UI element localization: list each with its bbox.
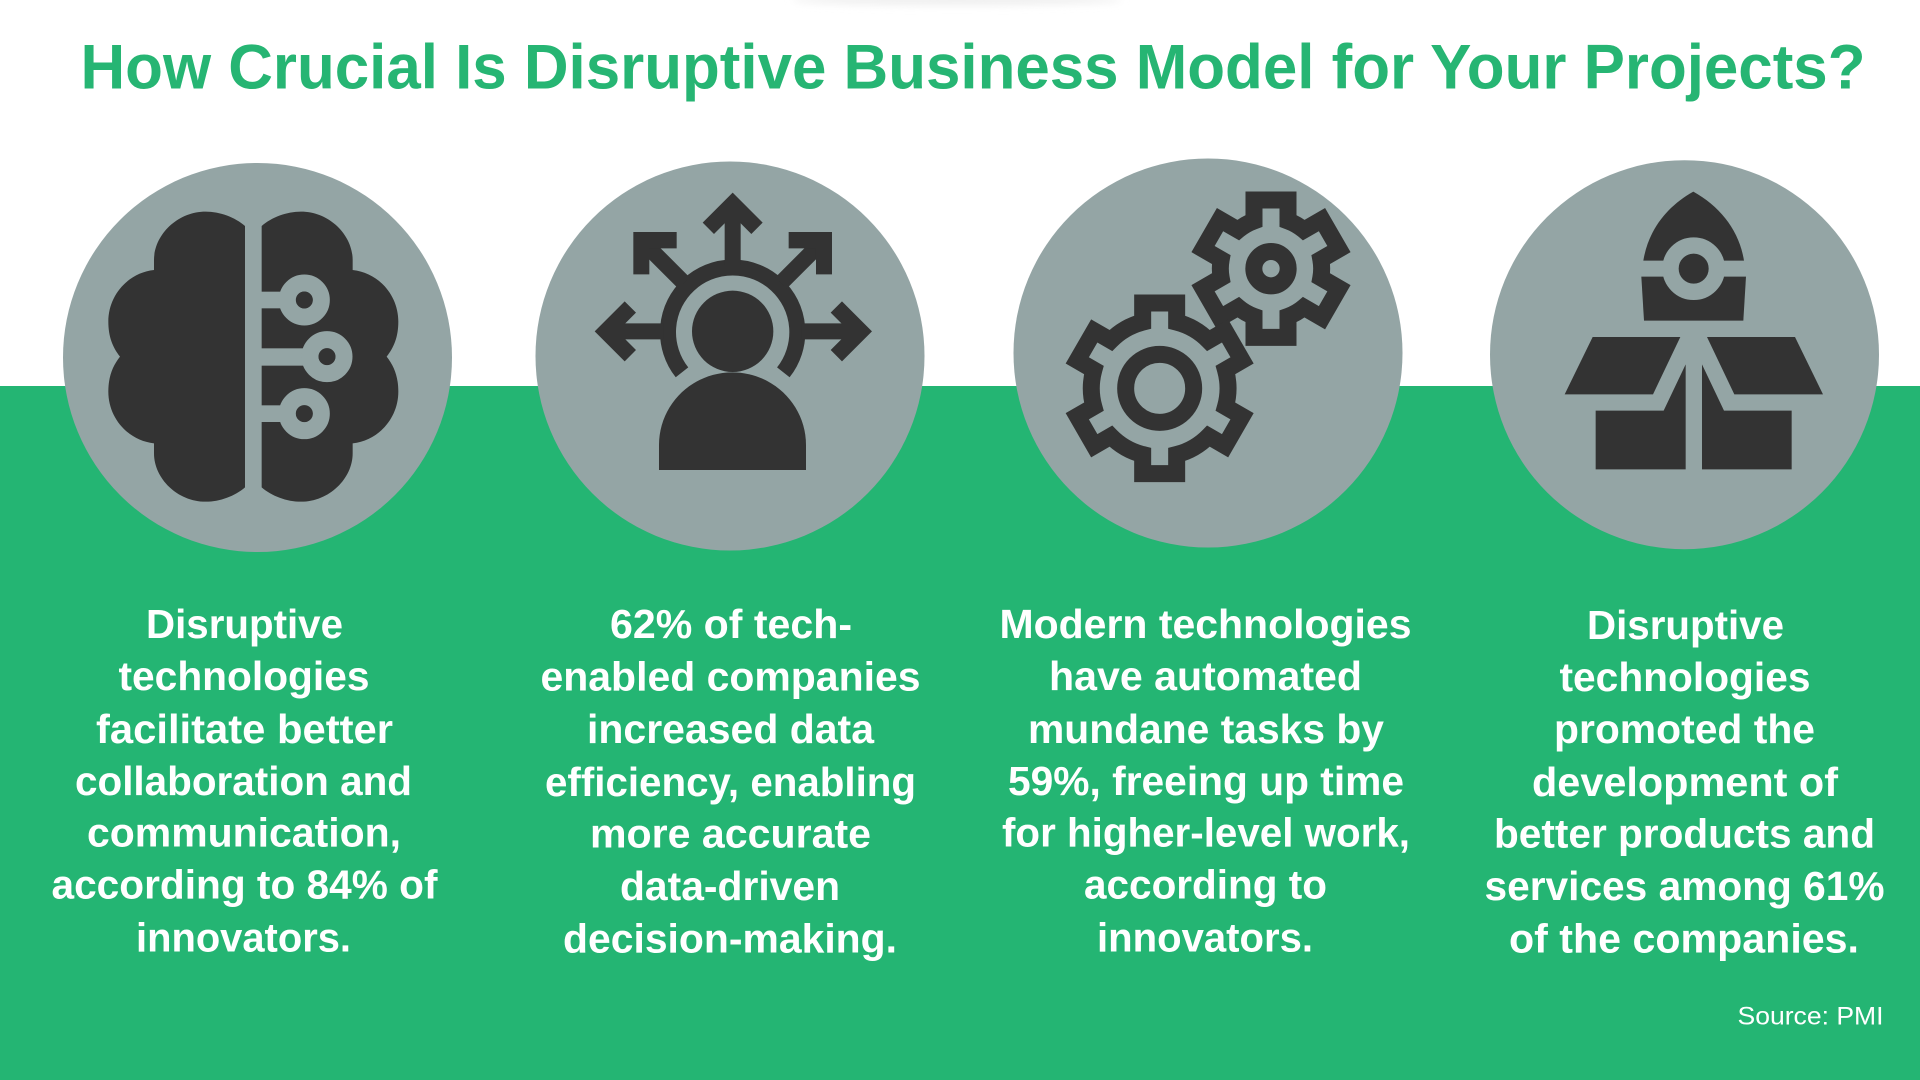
text block: collaboration: facilitate better — [96, 706, 393, 752]
text block: collaboration: innovators. — [136, 915, 351, 961]
panel: person / data efficiency — [536, 162, 924, 962]
panel: brain / collaboration — [52, 163, 452, 961]
text block: collaboration — [52, 601, 438, 961]
circle background — [1014, 158, 1402, 548]
text block: automation: 59%, freeing up time — [1008, 758, 1404, 804]
text block: products: of the companies. — [1509, 916, 1859, 962]
source note: Source: PMI — [1738, 1002, 1884, 1030]
text block: products: Disruptive — [1587, 602, 1784, 648]
text block: collaboration: technologies — [118, 653, 370, 699]
icon: person with arrows — [606, 204, 861, 470]
text block: products: better products and — [1494, 811, 1875, 857]
text block: data efficiency: efficiency, enabling — [545, 759, 916, 805]
icon: two gears — [1077, 200, 1339, 474]
text block: products: development of — [1532, 759, 1838, 805]
green background band — [0, 386, 1920, 1080]
text block: automation: have automated — [1049, 653, 1362, 699]
text block: data efficiency: enabled companies — [540, 654, 920, 700]
text block: collaboration: according to 84% of — [52, 861, 438, 907]
circle background — [63, 163, 452, 552]
text block: automation: according to — [1084, 861, 1327, 907]
text block: automation: for higher-level work, — [1002, 810, 1410, 856]
text block: products: promoted the — [1554, 706, 1815, 752]
text block: products: services among 61% — [1484, 863, 1884, 909]
text block: products — [1484, 602, 1884, 962]
text block: automation: Modern technologies — [1000, 601, 1412, 647]
text block: automation: mundane tasks by — [1028, 706, 1384, 752]
text block: data efficiency — [540, 601, 920, 962]
text block: collaboration: collaboration and — [75, 758, 412, 804]
text block: products: technologies — [1560, 654, 1810, 700]
text block: data efficiency: decision-making. — [563, 916, 897, 962]
text block: data efficiency: more accurate — [590, 811, 871, 857]
text block: data efficiency: 62% of tech- — [610, 601, 852, 647]
title: How Crucial Is Disruptive Business Model for Your Projects? — [80, 33, 1866, 103]
text block: automation — [1000, 601, 1412, 961]
icon: rocket launching from box — [1565, 192, 1823, 469]
circle background — [1490, 160, 1879, 549]
circle background — [536, 162, 924, 550]
text block: data efficiency: increased data — [587, 706, 875, 752]
panel: rocket box / products — [1484, 160, 1884, 962]
text block: collaboration: communication, — [87, 810, 401, 856]
text block: automation: innovators. — [1097, 915, 1313, 961]
text block: data efficiency: data-driven — [620, 863, 840, 909]
icon: brain with circuit — [108, 212, 398, 502]
panel: gears / automation — [1000, 158, 1412, 961]
text block: collaboration: Disruptive — [146, 601, 343, 647]
